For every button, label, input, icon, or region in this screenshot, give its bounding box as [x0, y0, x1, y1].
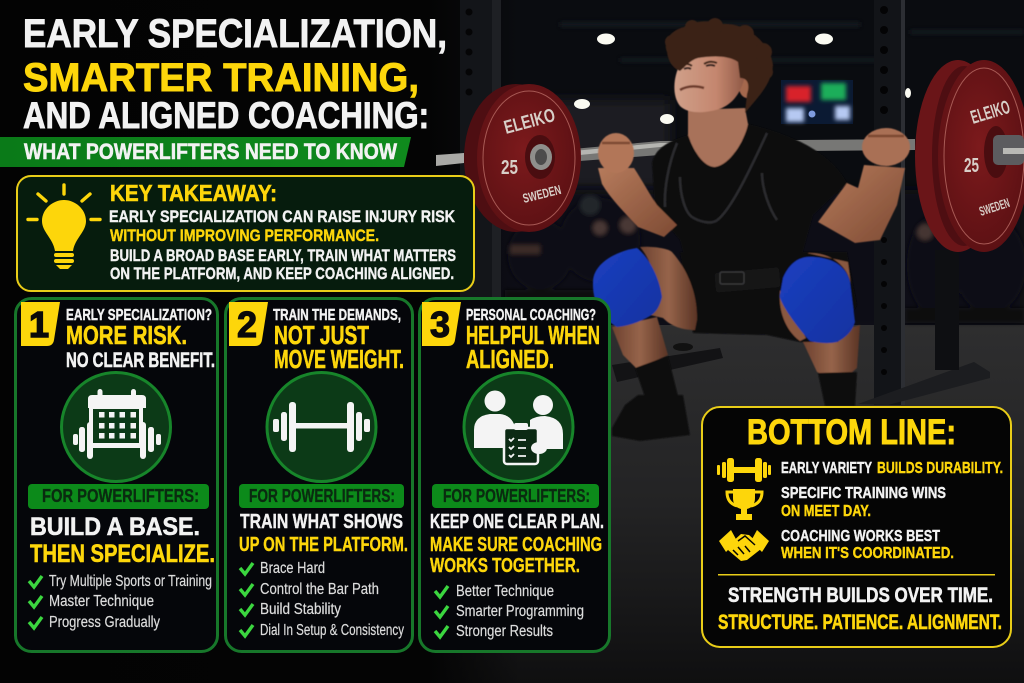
card 2 checklist: Dial In Setup & Consistency [260, 622, 404, 639]
card 1 heading: EARLY SPECIALIZATION? [66, 307, 212, 324]
icon: barbell [267, 372, 376, 482]
for powerlifters tag 1: FOR POWERLIFTERS: [42, 486, 199, 506]
card 3 advice [430, 511, 604, 577]
takeaway text: ON THE PLATFORM, AND KEEP COACHING ALIGNED. [110, 264, 454, 283]
bottom line heading: BOTTOM LINE: [747, 413, 956, 452]
weight plates: left [464, 84, 581, 232]
icon: light bulb [28, 185, 100, 269]
card 3 advice: KEEP ONE CLEAR PLAN. [430, 511, 604, 533]
bottom line item 3: COACHING WORKS BEST [781, 528, 940, 545]
left shin [612, 317, 668, 369]
card 3 heading: ALIGNED. [466, 344, 554, 374]
scoreboard [781, 80, 853, 124]
plate label: ELEIKO [502, 105, 558, 139]
crowd: left [505, 195, 640, 320]
panel: bottom line [702, 407, 1011, 647]
card 2 heading: TRAIN THE DEMANDS, [273, 307, 401, 324]
icon: handshake [719, 530, 769, 561]
ceiling lights [574, 34, 911, 124]
card 1 advice: THEN SPECIALIZE. [30, 540, 215, 568]
subtitle banner: WHAT POWERLIFTERS NEED TO KNOW [24, 139, 398, 164]
card 2 advice: TRAIN WHAT SHOWS [240, 511, 403, 533]
card 3 checklist: Better Technique [456, 583, 554, 600]
weight plates: right [915, 60, 1024, 252]
takeaway text: BUILD A BROAD BASE EARLY, TRAIN WHAT MATTERS [110, 246, 456, 265]
neck [688, 108, 748, 167]
bottom line item 1 [781, 460, 1003, 477]
title: AND ALIGNED COACHING: [23, 95, 429, 136]
badge 3: 3 [430, 304, 450, 345]
knee sleeve: right [780, 257, 855, 343]
card 3 checklist: Stronger Results [456, 623, 553, 640]
card 1 checklist: Try Multiple Sports or Training [49, 573, 212, 590]
eyes and mouth [682, 62, 717, 66]
panel: card 3 personal coaching [420, 298, 610, 652]
card 3 heading: HELPFUL WHEN [466, 320, 600, 350]
panel: card 2 train the demands [226, 298, 412, 652]
card 2 checklist: Brace Hard [260, 560, 325, 577]
title: SMARTER TRAINING, [23, 56, 419, 100]
takeaway text: EARLY SPECIALIZATION CAN RAISE INJURY RISK [109, 207, 456, 226]
card 1 advice: BUILD A BASE. [30, 513, 200, 541]
closing statement [718, 584, 1002, 634]
icon: calendar and barbell [62, 372, 170, 482]
bottom line item 1: EARLY VARIETY [781, 460, 872, 477]
card 1 checklist: Master Technique [49, 593, 154, 610]
icon: coach and athlete with clipboard [464, 372, 573, 482]
badge 3 [422, 302, 461, 346]
title [23, 12, 447, 136]
card 2 checklist: Control the Bar Path [260, 581, 379, 598]
card 1 heading [66, 307, 215, 372]
ear [739, 76, 755, 98]
icon: dumbbell [717, 458, 771, 482]
right shin [803, 325, 860, 382]
hands [598, 133, 634, 173]
card 3 checklist: Smarter Programming [456, 603, 584, 620]
badge 1 [21, 302, 60, 346]
card 2 advice [239, 511, 408, 556]
knee sleeve: left [593, 248, 662, 327]
face [674, 54, 745, 112]
bottom line item 3: WHEN IT'S COORDINATED. [781, 545, 954, 562]
card 1 advice [30, 513, 215, 568]
crowd: right [905, 215, 1024, 323]
hair [665, 18, 773, 113]
title: EARLY SPECIALIZATION, [23, 12, 447, 56]
bottom line item 2: SPECIFIC TRAINING WINS [781, 485, 946, 502]
right thigh sliver [780, 253, 851, 341]
rack upright: right [874, 0, 905, 405]
socks [635, 356, 857, 406]
card 1 heading: MORE RISK. [66, 320, 187, 350]
for powerlifters tag 3: FOR POWERLIFTERS: [443, 486, 590, 506]
right arm [818, 165, 905, 243]
belt [714, 267, 781, 293]
rack upright: left [460, 0, 501, 300]
bottom line item 3 [781, 528, 954, 562]
shorts [680, 252, 857, 342]
left thigh [640, 247, 697, 330]
rack base and floor platform [612, 250, 990, 405]
card 2 heading [273, 307, 404, 374]
takeaway text: WITHOUT IMPROVING PERFORMANCE. [110, 226, 379, 245]
card 3 checklist [435, 583, 584, 640]
card 3 advice: MAKE SURE COACHING [430, 534, 602, 556]
badge 2 [229, 302, 268, 346]
badge 1: 1 [29, 304, 49, 345]
badge 2: 2 [237, 304, 257, 345]
card 2 heading: MOVE WEIGHT. [274, 344, 404, 374]
card 3 heading [466, 307, 600, 374]
card 3 advice: WORKS TOGETHER. [430, 555, 580, 577]
left arm [598, 168, 677, 237]
icon: trophy [727, 489, 762, 520]
singlet straps [665, 133, 777, 222]
for powerlifters tag 3 [432, 484, 599, 508]
card 2 checklist [240, 560, 404, 639]
card 1 checklist [29, 573, 212, 631]
takeaway text [109, 180, 456, 283]
athlete [593, 18, 910, 441]
left shoe [612, 395, 690, 441]
card 2 heading: NOT JUST [274, 320, 369, 350]
weight plates: left: SWEDEN [521, 182, 563, 206]
card 1 heading: NO CLEAR BENEFIT. [66, 349, 215, 372]
panel: card 1 early specialization [16, 298, 218, 652]
barbell shaft [436, 139, 915, 166]
card 2 advice: UP ON THE PLATFORM. [239, 534, 408, 556]
for powerlifters tag 1 [28, 484, 209, 509]
bottom line item 2: ON MEET DAY. [781, 503, 871, 520]
card 3 heading: PERSONAL COACHING? [466, 307, 596, 324]
for powerlifters tag 2: FOR POWERLIFTERS: [249, 486, 395, 506]
card 1 checklist: Progress Gradually [49, 614, 160, 631]
weight plates: right: 25 [964, 155, 979, 177]
torso shirt [652, 124, 847, 278]
card 2 checklist: Build Stability [260, 601, 341, 618]
for powerlifters tag 2 [239, 484, 404, 508]
weight plates: left: 25 [501, 157, 518, 179]
panel: key takeaway [17, 176, 474, 291]
bottom line item 2 [781, 485, 946, 520]
takeaway text: KEY TAKEAWAY: [110, 180, 277, 206]
